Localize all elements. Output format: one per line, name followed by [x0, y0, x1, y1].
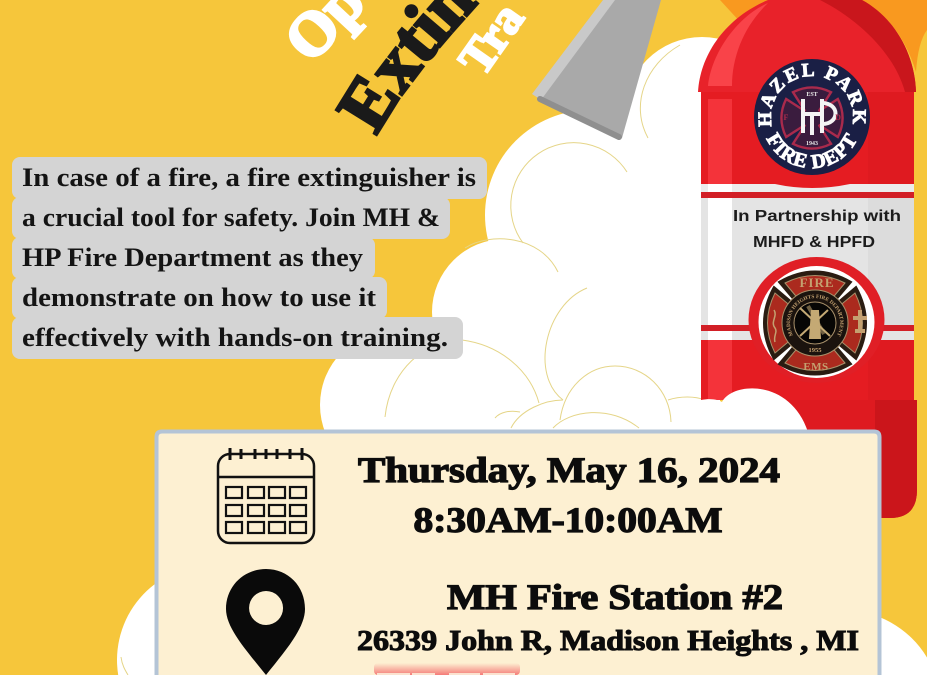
- description text: effectively with hands-on training.: [22, 323, 448, 352]
- badge side icons: [773, 310, 867, 342]
- description text: In case of a fire, a fire extinguisher is: [22, 163, 476, 192]
- badge: Hazel Park Fire Dept: 1943: [806, 141, 818, 147]
- event time: 8:30AM-10:00AM: [414, 500, 722, 540]
- icon: location pin: [226, 569, 305, 675]
- heading (rotated): [272, 0, 534, 137]
- flame behind extinguisher: [720, 0, 927, 72]
- event address: 26339 John R, Madison Heights , MI: [357, 626, 859, 657]
- cloud bump over extinguisher: [701, 388, 808, 432]
- badge lettering: [758, 63, 866, 170]
- icon: calendar: [218, 448, 314, 543]
- description text: a crucial tool for safety. Join MH &: [22, 203, 440, 232]
- badge: Hazel Park Fire Dept: [754, 59, 870, 188]
- badge lettering: [786, 275, 844, 373]
- badge cross: [781, 87, 843, 149]
- badge lettering: 1955: [808, 347, 822, 354]
- badge lettering: HAZEL PARK: [758, 63, 866, 127]
- partnership text: MHFD & HPFD: [753, 234, 875, 251]
- description text: HP Fire Department as they: [22, 243, 363, 272]
- event date: Thursday, May 16, 2024: [358, 450, 780, 490]
- badge tools: [800, 306, 830, 338]
- extinguisher body: [701, 92, 914, 184]
- description text: [22, 163, 476, 352]
- partnership text: [733, 208, 901, 251]
- badge monogram: [803, 99, 836, 135]
- description highlight: [12, 157, 487, 359]
- description text: demonstrate on how to use it: [22, 283, 376, 312]
- extinguisher dome: [698, 0, 916, 92]
- fire extinguisher: [698, 0, 917, 518]
- badge: Hazel Park Fire Dept: F: [784, 113, 789, 122]
- badge lettering: MADISON HEIGHTS FIRE DEPARTMENT: [786, 294, 844, 337]
- badge lettering: FIRE DEPT: [766, 131, 857, 170]
- badge: Madison Heights Fire Department: [748, 257, 884, 378]
- badge: Hazel Park Fire Dept: EST: [806, 92, 818, 98]
- badge lettering: FIRE: [799, 275, 835, 290]
- glowing label, cut off by frame: [374, 663, 520, 675]
- event details panel: [156, 432, 880, 675]
- event location: MH Fire Station #2: [447, 577, 783, 617]
- badge: Hazel Park Fire Dept: D: [835, 113, 841, 122]
- partnership text: In Partnership with: [733, 208, 901, 225]
- description panel: [12, 157, 487, 359]
- badge lettering: EMS: [803, 361, 829, 373]
- nozzle: [532, 0, 661, 138]
- extinguisher base: [760, 400, 917, 518]
- badge maltese cross: [764, 272, 866, 374]
